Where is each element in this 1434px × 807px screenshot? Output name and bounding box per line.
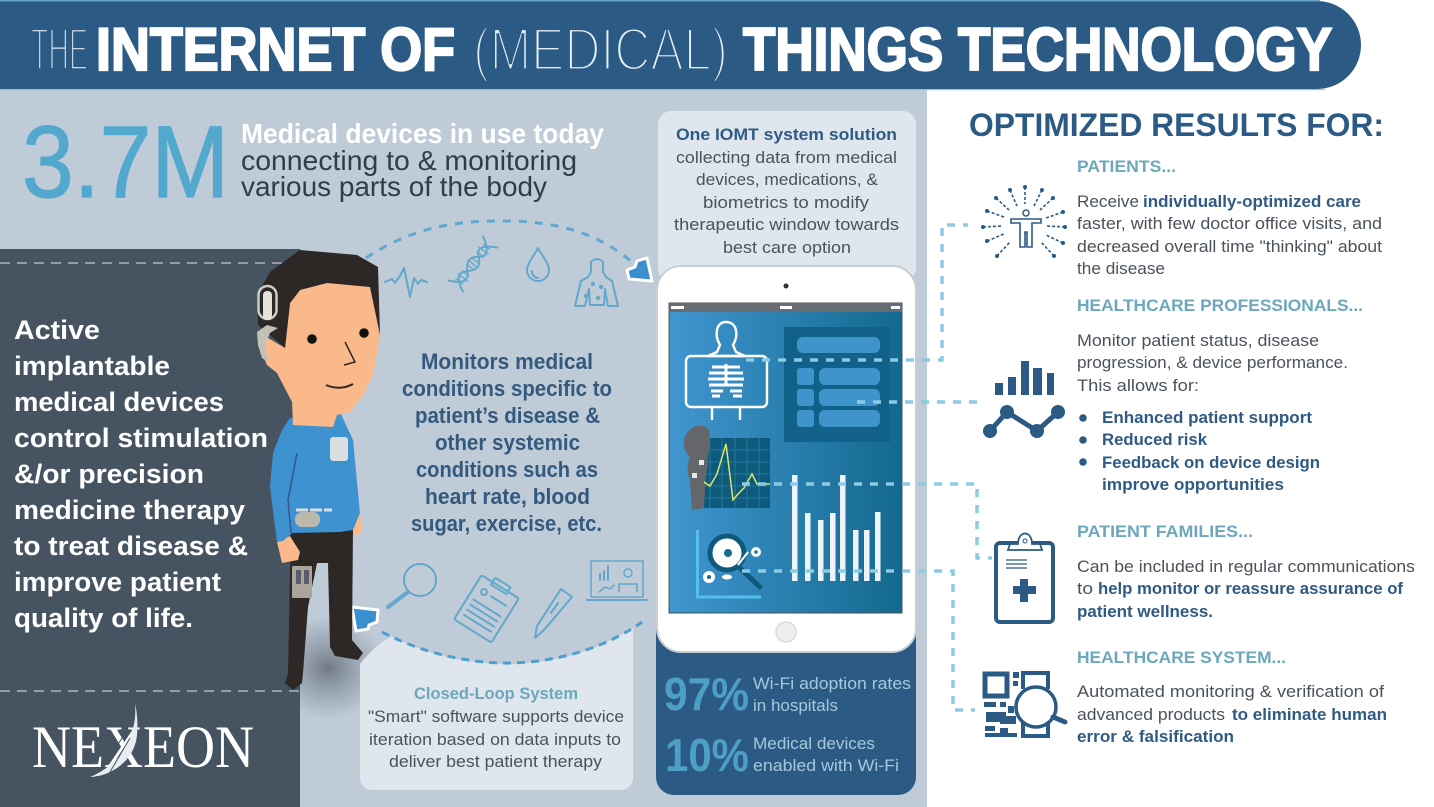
center text: monitors medical conditions: sugar, exercise, etc. [411,511,602,536]
panel: wi-fi statistics: Wi-Fi adoption rates [753,674,911,693]
section: healthcare professionals: This allows for: [1077,376,1199,395]
statistic description [241,118,604,202]
title banner: INTERNET OF [96,16,455,83]
panel: implantable devices: Active [14,315,100,345]
section: healthcare professionals: Feedback on device design [1102,453,1320,472]
section: healthcare professionals: improve opportunities [1102,475,1284,494]
abdominal device [295,510,332,527]
section: healthcare professionals [1077,296,1363,494]
panel: one IOMT system solution: devices, medications, & [696,170,879,189]
section: healthcare system: error & falsification [1077,727,1234,746]
section: patients: individually-optimized care [1143,192,1361,211]
ECG [684,426,770,510]
logo: Nexeon: NEXEON [32,714,254,780]
panel: closed-loop system [360,628,633,790]
statistic: 3.7M: 3.7M [22,105,229,219]
section: healthcare professionals: Enhanced patient support [1102,408,1312,427]
center text: monitors medical conditions: conditions specific to [402,376,612,401]
panel: wi-fi statistics: Medical devices [753,734,875,753]
dashed arc: top [366,221,632,262]
section: healthcare system: HEALTHCARE SYSTEM... [1077,648,1286,667]
icon: QR code with magnifier [984,672,1065,737]
section: patient families: patient wellness. [1077,602,1213,621]
icon: water drop [527,248,549,281]
title banner: THE [31,16,88,83]
section: healthcare professionals: Reduced risk [1102,430,1208,449]
panel: wi-fi statistics: enabled with Wi-Fi [753,756,899,775]
panel: implantable devices: quality of life. [14,603,193,633]
panel: wi-fi statistics: 97% [664,668,749,720]
icon: heartbeat [385,268,427,297]
panel: closed-loop system: deliver best patient therapy [389,752,603,771]
center text: monitors medical conditions: heart rate, blood [425,484,590,509]
arrow: top [627,258,652,281]
section: healthcare professionals: HEALTHCARE PROFESSIONALS... [1077,296,1363,315]
hair [257,250,380,348]
arrow: bottom [352,607,378,631]
hand right [353,513,362,535]
hand [277,536,300,563]
section: healthcare system: advanced products [1077,705,1225,724]
section: healthcare system: to eliminate human [1232,705,1387,724]
center text: monitors medical conditions: conditions such as [416,457,598,482]
foot shadow [300,622,374,714]
panel: implantable devices: control stimulation [14,423,268,453]
pocket device [330,437,348,461]
icon: DNA [449,236,497,292]
panel: implantable devices: implantable [14,351,170,381]
face and neck [258,283,380,427]
section: patients: Receive [1077,192,1139,211]
pants [285,527,363,690]
statistic description: connecting to & monitoring [241,145,577,176]
panel: implantable devices: to treat disease & [14,531,248,561]
connector: healthcare system [742,571,975,710]
person with implanted devices [257,250,380,690]
center text: monitors medical conditions: patient’s disease & [415,403,600,428]
center text: monitors medical conditions: other systemic [435,430,580,455]
panel: one IOMT system solution: One IOMT system solution [676,125,897,144]
x-ray [686,322,767,420]
bars [792,475,880,581]
panel: implantable devices: medicine therapy [14,495,245,525]
title banner: (MEDICAL) [473,16,728,83]
title banner: THINGS TECHNOLOGY [743,16,1332,83]
icon: thermometer [535,589,572,638]
belt controller [292,566,312,598]
panel: wi-fi statistics: in hospitals [753,696,838,715]
section: healthcare system [1077,648,1387,746]
gray background panel [0,88,927,807]
section: patients: decreased overall time "thinking" about [1077,237,1382,256]
statistic description: various parts of the body [241,171,547,202]
icon: chart and trend [983,361,1065,438]
status bar [669,303,902,312]
section: healthcare professionals: progression, & device performance. [1077,353,1348,372]
section: healthcare professionals: Monitor patient status, disease [1077,331,1319,350]
sound processor on the ear [257,286,278,362]
icon: magnifier [388,564,436,607]
data table [784,327,890,442]
icon: body [575,259,618,306]
center text: monitors medical conditions [402,349,612,536]
section: patients [1077,157,1382,278]
heading: optimized results: OPTIMIZED RESULTS FOR: [969,107,1384,143]
statistic description: Medical devices in use today [241,118,604,149]
panel: closed-loop system: iteration based on data inputs to [369,730,621,749]
panel: implantable devices: &/or precision [14,459,204,489]
connector: healthcare professionals [857,400,978,404]
dashed arc: bottom [382,622,642,663]
center text: monitors medical conditions: Monitors medical [421,349,593,374]
tablet [657,266,916,652]
panel: closed-loop system: "Smart" software supports device [368,707,624,726]
icon: clipboard with cross [996,534,1053,622]
mouth [326,384,353,388]
connector: patient families [742,484,992,558]
panel: one IOMT system solution: therapeutic window towards [674,215,899,234]
panel: one IOMT system solution: collecting data from medical [676,148,897,167]
panel: one IOMT system solution: best care option [723,238,851,257]
panel: implantable devices [0,249,300,807]
panel: one IOMT system solution [658,111,916,281]
shirt crease [288,453,297,533]
section: patient families: help monitor or reassure assurance of [1098,579,1403,598]
section: patient families: to [1077,579,1093,598]
eyes [307,328,369,344]
magnifier on chart [698,530,761,597]
nose [344,342,355,365]
panel: implantable devices: medical devices [14,387,224,417]
panel: closed-loop system: Closed-Loop System [414,684,578,703]
section: healthcare system: Automated monitoring & verification of [1077,682,1384,701]
section: patient families [1077,522,1415,621]
panel: one IOMT system solution: biometrics to modify [703,193,870,212]
section: patients: faster, with few doctor office visits, and [1077,214,1382,233]
icon: clipboard [454,571,522,643]
panel: wi-fi statistics: 10% [665,729,749,781]
icon: monitor with presenter [587,561,647,600]
panel: wi-fi statistics [656,630,916,795]
connector: patients [746,225,968,360]
panel: implantable devices: improve patient [14,567,221,597]
section: patients: PATIENTS... [1077,157,1176,176]
shirt [270,412,360,542]
tablet screen [669,303,902,613]
section: patient families: Can be included in regular communications [1077,557,1415,576]
section: patients: the disease [1077,259,1165,278]
section: patient families: PATIENT FAMILIES... [1077,522,1253,541]
icon: patient with rays [981,185,1067,258]
title banner [0,0,1361,90]
